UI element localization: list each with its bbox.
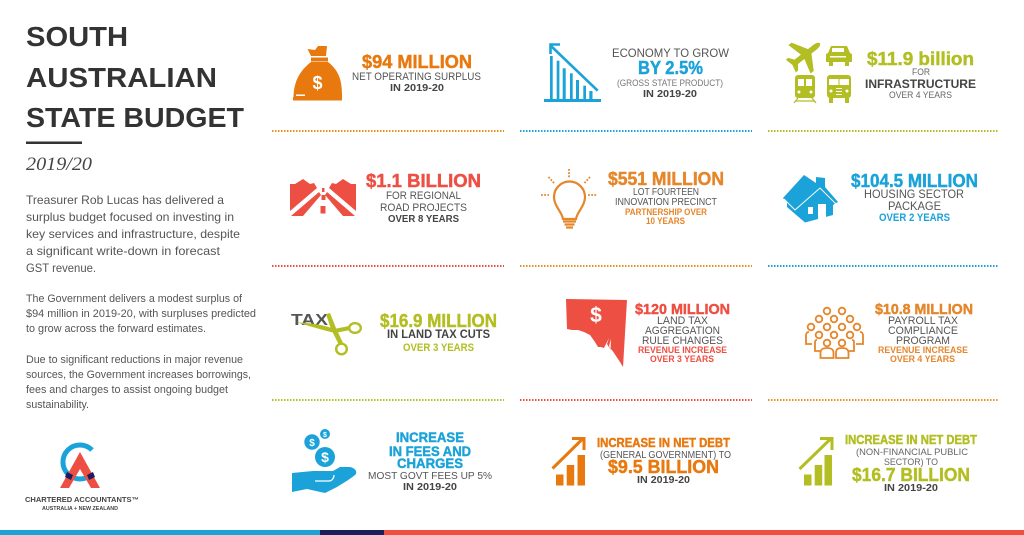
figure: $16.9 MILLION [380, 311, 497, 331]
icon: hand with coins: $ [321, 449, 329, 465]
intro paragraph: surplus budget focused on investing in [26, 210, 234, 224]
icon: scissors: TAX [291, 312, 328, 329]
caption: REVENUE INCREASE [878, 345, 968, 355]
intro paragraph: GST revenue. [26, 261, 96, 275]
caption: NET OPERATING SURPLUS [352, 71, 481, 83]
caption [368, 471, 492, 493]
caption: FOR [912, 67, 930, 77]
panel: land tax cuts [291, 311, 497, 354]
caption: MOST GOVT FEES UP 5% [368, 471, 492, 482]
title [26, 21, 244, 133]
bottom colour band [0, 530, 1024, 535]
caption: LAND TAX [657, 315, 709, 327]
icon: South Australia map: $ [590, 304, 602, 327]
figure: IN FEES AND [389, 443, 471, 459]
caption: OVER 8 YEARS [388, 213, 459, 225]
caption: PACKAGE [888, 199, 941, 213]
icon: scissors [291, 312, 361, 354]
caption: HOUSING SECTOR [864, 187, 964, 201]
panel: net debt general government [552, 436, 731, 486]
icon: South Australia map [566, 299, 627, 367]
intro paragraph: a significant write-down in forecast [26, 244, 221, 258]
detail: IN 2019-20 [643, 88, 697, 100]
subtitle: year: 2019/20 [26, 154, 93, 175]
caption [864, 187, 964, 224]
heading: INCREASE IN NET DEBT [845, 433, 977, 447]
caption: IN 2019-20 [637, 474, 690, 486]
caption: REVENUE INCREASE [638, 345, 727, 355]
paragraph: surplus [26, 293, 256, 335]
caption [387, 329, 490, 354]
detail: SECTOR) TO [884, 457, 938, 468]
caption: 10 YEARS [646, 216, 685, 227]
caption: ECONOMY TO GROW [612, 46, 730, 60]
caption: OVER 2 YEARS [879, 212, 950, 224]
intro paragraph: key services and infrastructure, despite [26, 227, 240, 241]
icon: hand with coins: $ [323, 432, 327, 439]
figure: $120 MILLION [635, 301, 730, 318]
paragraph: revenue: sustainability. [26, 399, 89, 411]
figure: BY 2.5% [638, 58, 703, 78]
figure: $11.9 billion [867, 49, 974, 69]
title: SOUTH [26, 21, 128, 52]
icon: hand with coins: $ [309, 438, 315, 449]
caption [878, 315, 968, 364]
heading: INCREASE IN NET DEBT [597, 436, 730, 450]
icon: house [783, 175, 838, 222]
detail: (NON-FINANCIAL PUBLIC [856, 447, 968, 458]
paragraph: revenue: sources, the Government increases borrowings, [26, 369, 251, 381]
paragraph: revenue: fees and charges to assist ongoing budget [26, 384, 228, 396]
figure: $104.5 MILLION [851, 171, 978, 191]
caption [865, 67, 976, 101]
title: AUSTRALIAN [26, 62, 217, 93]
caption: INNOVATION PRECINCT [615, 197, 717, 208]
panel: infrastructure [780, 29, 976, 103]
icon: road [290, 179, 356, 216]
caption: PROGRAM [896, 335, 950, 347]
caption: COMPLIANCE [888, 325, 958, 337]
panel: regional roads [290, 171, 481, 225]
figure: $94 MILLION [362, 52, 472, 72]
title underline [26, 142, 82, 144]
caption: OVER 4 YEARS [890, 354, 955, 364]
caption: OVER 3 YEARS [403, 342, 474, 354]
figure: INCREASE [396, 429, 464, 445]
detail [856, 447, 968, 468]
detail: (GROSS STATE PRODUCT) [617, 78, 723, 88]
panel: economy to grow [544, 44, 730, 102]
title: STATE BUDGET [26, 102, 244, 133]
icon: transport [780, 29, 852, 103]
icon: hand with coins [292, 429, 356, 493]
caption: IN LAND TAX CUTS [387, 329, 490, 341]
icon: rising bars green [800, 438, 832, 486]
paragraph: surplus: The Government delivers a modest surplus of [26, 293, 243, 305]
intro paragraph [26, 193, 240, 275]
panel: housing [783, 171, 978, 224]
caption: RULE CHANGES [642, 335, 723, 347]
caption [615, 187, 717, 227]
paragraph: surplus: $94 million in 2019-20, with surpluses predicted [26, 308, 256, 320]
panel: $120 million land tax [566, 299, 730, 367]
panel: Lot Fourteen [541, 169, 724, 228]
icon: crowd [806, 308, 863, 358]
caption [380, 190, 467, 225]
caption: INFRASTRUCTURE [865, 79, 976, 91]
icon: rising bars orange [552, 438, 585, 486]
paragraph: revenue [26, 354, 251, 411]
caption: IN 2019-20 [403, 481, 457, 493]
detail [617, 78, 723, 100]
caption: PARTNERSHIP OVER [625, 207, 707, 218]
icon: money bag: $ [312, 73, 323, 93]
panel: net debt non-financial public sector [800, 433, 977, 494]
figure: $9.5 BILLION [608, 457, 719, 477]
icon: growth chart [544, 44, 601, 102]
paragraph: surplus: to grow across the forward estimates. [26, 323, 206, 335]
logo: Chartered Accountants [25, 445, 139, 512]
figure: $1.1 BILLION [366, 171, 481, 191]
icon: light bulb [541, 169, 597, 228]
caption: IN 2019-20 [884, 482, 938, 494]
figure: $551 MILLION [608, 169, 724, 189]
panel: payroll tax [806, 301, 973, 364]
panel: fees and charges [292, 429, 492, 493]
paragraph: revenue: Due to significant reductions in major revenue [26, 354, 243, 366]
figure: CHARGES [397, 455, 463, 471]
icon: money bag [293, 46, 342, 100]
caption: ROAD PROJECTS [380, 202, 467, 214]
intro paragraph: Treasurer Rob Lucas has delivered a [26, 193, 224, 207]
caption: AGGREGATION [645, 325, 720, 337]
figure [389, 429, 471, 471]
caption: OVER 3 YEARS [650, 354, 714, 364]
panel: $94 million surplus [293, 46, 481, 100]
logo: Chartered Accountants: CHARTERED ACCOUNTANTS™ [25, 497, 139, 504]
figure: $16.7 BILLION [852, 465, 970, 485]
caption: FOR REGIONAL [386, 190, 461, 202]
caption [638, 315, 727, 364]
caption: OVER 4 YEARS [889, 90, 952, 101]
caption: PAYROLL TAX [888, 315, 959, 327]
detail: (GENERAL GOVERNMENT) TO [600, 450, 731, 461]
figure: $10.8 MILLION [875, 301, 973, 318]
caption: LOT FOURTEEN [633, 187, 699, 198]
logo: Chartered Accountants: AUSTRALIA + NEW ZEALAND [42, 506, 118, 512]
caption [352, 71, 481, 94]
caption: IN 2019-20 [390, 82, 444, 94]
